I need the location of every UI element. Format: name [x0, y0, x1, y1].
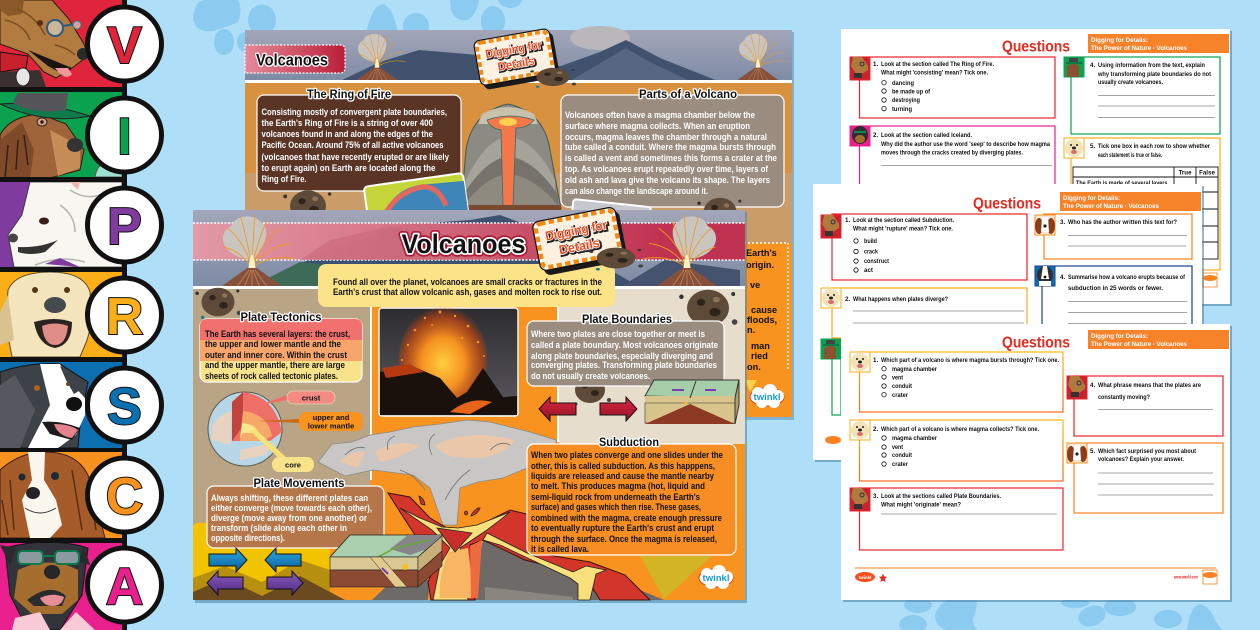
footer logo [825, 436, 841, 444]
twinkl logo front [699, 565, 733, 589]
letter circle S: S [107, 378, 142, 436]
ash cloud [318, 420, 556, 525]
footer: twinkl [859, 575, 871, 580]
question 1: act [864, 267, 873, 274]
question 4 [1064, 57, 1220, 134]
front badge rock [589, 248, 643, 270]
question 3 [850, 488, 1063, 550]
bottom right ground [640, 556, 712, 599]
arrow: blue left [265, 548, 301, 572]
panel: The Ring of Fire: Pacific Ocean. Around 75% of all active volcanoes [262, 140, 444, 150]
question 2: moves through the cracks created by diverging plates. [881, 150, 1023, 156]
question 1: Look at the section called The Ring of Fire. [881, 61, 994, 68]
question 5: volcanoes? Explain your answer. [1098, 456, 1184, 463]
lava spots [419, 496, 480, 516]
rock under plate boundaries [569, 377, 611, 406]
panel: VIPERS dog strips [0, 0, 162, 630]
question 3: What might 'originate' mean? [881, 502, 961, 508]
question 4: why transforming plate boundaries do not [1097, 71, 1211, 78]
rock right [679, 290, 737, 330]
photo card [570, 199, 651, 237]
footer logo [1203, 273, 1217, 287]
question 1: dancing [892, 80, 914, 87]
arrow: blue right [209, 548, 247, 572]
panel: The Ring of Fire: to erupt again) on Earth are located along the [262, 163, 436, 173]
question 4: constantly moving? [1098, 394, 1150, 401]
question 1 [850, 57, 1055, 118]
letter circle I [88, 98, 162, 172]
question 4 [1035, 266, 1192, 336]
strip I: bloodhound with hat [0, 92, 122, 178]
question 5: The Earth is made of several layers. [1076, 180, 1169, 187]
panel: Plate Boundaries: called a plate boundary. Most volcanoes originate [531, 340, 718, 351]
panel: Plate Movements [207, 478, 384, 548]
panel: The Ring of Fire: the Earth's Ring of Fire is a string of over 400 [262, 118, 433, 128]
back poster right orange panel [700, 243, 792, 417]
grey lower strip [485, 587, 573, 600]
back poster right orange panel: ried [751, 351, 768, 361]
question 4: subduction in 25 words or fewer. [1068, 285, 1163, 292]
red V crater [437, 528, 472, 552]
panel: Parts of a Volcano: occurs, magma leaves the chamber through a natural [565, 132, 767, 142]
panel: Plate Boundaries: do not usually create volcanoes. [531, 371, 650, 382]
panel: worksheet 3 [841, 324, 1232, 602]
question 2: What happens when plates diverge? [853, 296, 948, 303]
letter circle V [88, 7, 162, 81]
question 2: Which part of a volcano is where magma collects? Tick one. [881, 426, 1039, 433]
photo: erupting volcano [379, 306, 518, 416]
arrow: purple left [207, 571, 243, 595]
ash cloud swirls [345, 434, 510, 500]
panel: The Ring of Fire: (volcanoes that have recently erupted or are likely [262, 152, 450, 162]
question 1: turning [892, 106, 912, 113]
question 3: Who has the author written this text for? [1068, 219, 1177, 226]
back poster right orange panel: cause [751, 305, 777, 315]
label: upper and lower mantle: lower mantle [308, 422, 354, 430]
back poster right orange panel: n. [747, 325, 755, 335]
letter circle C [88, 458, 162, 532]
left edge question with green box [821, 339, 841, 415]
back poster right orange panel: origin. [746, 260, 774, 270]
arrow: red left [539, 397, 576, 421]
lava red lobes [388, 493, 650, 600]
question 1: 1. [873, 357, 878, 364]
letter circle S [88, 368, 162, 442]
panel: Parts of a Volcano [561, 89, 784, 207]
question 2: Look at the section called Iceland. [881, 132, 972, 139]
banner: Digging for Details: [1063, 195, 1120, 202]
question 1: build [864, 238, 877, 245]
footer: www.twinkl.com [1173, 574, 1198, 580]
panel: The Ring of Fire: volcanoes found in and along the edges of the [262, 129, 433, 139]
panel: Subduction: surface) and gases which then rise. These gases, [531, 502, 701, 513]
question 2: 2. [845, 296, 850, 303]
letter circle C: C [106, 468, 143, 526]
back poster right orange panel: man [751, 341, 770, 351]
back poster header scene [245, 26, 792, 83]
question 4: 4. [1090, 62, 1095, 69]
strip C: spaniel [0, 452, 122, 538]
intro callout [318, 264, 615, 307]
question 1 [821, 214, 1027, 280]
label: crust: crust [302, 394, 321, 402]
panel: Subduction: through the surface. Once the magma is released, [531, 534, 717, 545]
intro callout: Earth's crust that allow volcanic ash, gases and molten rock to rise out. [333, 287, 602, 298]
question 5: Which fact surprised you most about [1098, 448, 1196, 455]
question 5 [1067, 443, 1223, 513]
panel: Subduction: other, this is called subduction. As this happpens, [531, 461, 715, 472]
panel: Plate Tectonics: sheets of rock called tectonic plates. [205, 371, 338, 382]
question 1: vent [892, 374, 903, 382]
panel: Subduction: to eventually rupture the Earth's crust and erupt [531, 523, 715, 534]
back poster title pill: Volcanoes [256, 52, 328, 70]
panel: The Ring of Fire: Ring of Fire. [262, 174, 306, 184]
panel: Subduction [527, 437, 736, 555]
panel: The Ring of Fire [257, 89, 461, 191]
heading: Questions [1002, 38, 1070, 56]
magma stem centre [440, 548, 474, 598]
letter circle R: R [106, 288, 143, 346]
intro callout: Found all over the planet, volcanoes are small cracks or fractures in the [333, 277, 602, 288]
panel: Subduction: it is called lava. [531, 544, 589, 555]
panel: Subduction: to melt. This produces magma (hot, liquid and [531, 481, 705, 492]
diagram: diverging plates block [645, 380, 739, 424]
panel: Plate Tectonics: the upper and lower mantle and the [205, 339, 341, 350]
back poster title pill [245, 45, 345, 73]
panel: Parts of a Volcano: top. As volcanoes erupt repeatedly over time, layers of [565, 164, 769, 174]
panel: Parts of a Volcano: Volcanoes often have a magma chamber below the [565, 110, 755, 120]
back poster right orange panel: on. [747, 362, 761, 372]
question 4: Using information from the text, explain [1098, 62, 1205, 69]
question 2 [850, 126, 1055, 196]
question 3: Look at the sections called Plate Boundaries. [881, 493, 1001, 500]
question 5: each statement is true or false. [1098, 152, 1162, 159]
panel: Subduction: combined with the magma, create enough pressure [531, 513, 722, 524]
back poster right orange panel: ve [750, 280, 760, 290]
panel: Plate Tectonics: The Earth has several layers: the crust, [205, 329, 350, 340]
magma stem red stripe [470, 540, 482, 598]
question 5: False [1199, 170, 1215, 176]
panel: The Ring of Fire: Consisting mostly of convergent plate boundaries, [262, 107, 447, 117]
panel: Plate Movements: transform (slide along each other in [211, 523, 347, 534]
banner [1060, 192, 1201, 211]
label: crust [287, 391, 335, 404]
panel: Plate Tectonics: and the upper mantle, there are large [205, 360, 345, 371]
question 4: usually create volcanoes. [1098, 79, 1163, 86]
panel: The Ring of Fire: The Ring of Fire [307, 89, 391, 101]
question 1: Look at the section called Subduction. [853, 217, 954, 224]
twinkl logo back [750, 384, 784, 408]
panel: worksheet 1 [841, 29, 1232, 306]
chart: cross-section of a volcano [461, 104, 561, 213]
back poster badge rock [530, 68, 576, 88]
question 1: 1. [873, 61, 878, 68]
chart: volcano with magma and ash cloud [318, 420, 664, 600]
panel: Plate Movements: diverge (move away from one another) or [211, 513, 367, 524]
question 3: 3. [873, 493, 878, 500]
strip A: rottweiler with glasses [0, 542, 122, 630]
question 1: magma chamber [892, 366, 938, 373]
rock left [195, 288, 241, 319]
ash cloud patches [340, 435, 515, 468]
question 2 [850, 420, 1063, 481]
magma stem yellow [400, 508, 510, 600]
grey rock right [470, 540, 664, 600]
banner [1088, 330, 1229, 349]
question 4: What phrase means that the plates are [1098, 382, 1201, 389]
panel: Plate Tectonics: outer and inner core. Within the crust [205, 350, 348, 361]
question 4: 4. [1090, 382, 1095, 389]
question 2: magma chamber [892, 435, 938, 442]
question 5: Tick one box in each row to show whether [1098, 143, 1211, 150]
panel: Subduction: liquids are released and cause the mantle nearby [531, 471, 715, 482]
heading: Questions [973, 196, 1041, 212]
panel: Plate Movements: Always shifting, these different plates can [211, 493, 368, 504]
panel: worksheet 2 [813, 184, 1204, 462]
question 2: conduit [892, 452, 912, 459]
label: upper and lower mantle [299, 412, 363, 431]
letter circle P: P [107, 198, 142, 256]
heading: Questions [1002, 334, 1070, 352]
question 2: 2. [873, 426, 878, 433]
banner: The Power of Nature - Volcanoes [1091, 341, 1188, 348]
strip R: golden retriever [0, 272, 122, 357]
letter circle I: I [117, 108, 132, 166]
grey rock left [372, 578, 430, 600]
banner: Digging for Details: [1091, 37, 1148, 44]
bottom left ground [193, 522, 345, 600]
strip V: airedale dog with glasses [0, 0, 122, 87]
question 5: 5. [1090, 143, 1095, 150]
panel: Plate Tectonics [200, 312, 362, 382]
question 1: crack [864, 248, 878, 256]
footer [855, 568, 1217, 584]
question 1: What might 'rupture' mean? Tick one. [853, 226, 953, 232]
title highlight: Volcanoes [402, 229, 526, 259]
panel: Subduction: Subduction [599, 437, 659, 449]
question 1: destroying [892, 97, 920, 104]
panel: Plate Boundaries: converging plates. Transforming plate boundaries [531, 360, 717, 371]
question 4: Summarise how a volcano erupts because of [1068, 274, 1186, 281]
panel: Plate Boundaries: along plate boundaries, especially diverging and [531, 351, 713, 362]
question 1: 1. [845, 217, 850, 224]
panel: Subduction: semi-liquid rock from underneath the Earth's [531, 492, 700, 503]
question 1: crater [892, 392, 909, 399]
question 2 [821, 288, 1027, 338]
panel: Parts of a Volcano: is called a vent and sometimes this forms a crater at the [565, 153, 777, 163]
panel: Plate Tectonics: Plate Tectonics [240, 312, 322, 324]
question 1: conduit [892, 383, 912, 390]
question 1: Which part of a volcano is where magma bursts through? Tick one. [881, 357, 1059, 364]
panel: Plate Boundaries: Where two plates are close together or meet is [531, 329, 705, 340]
banner: The Power of Nature - Volcanoes [1063, 203, 1160, 210]
panel: Parts of a Volcano: surface where magma collects. When an eruption [565, 121, 750, 131]
back poster rock right [697, 198, 743, 229]
letter circle R [88, 278, 162, 352]
panel: back poster [245, 26, 794, 420]
panel: Parts of a Volcano: old ash and lava give the volcano its shape. The layers [565, 175, 770, 185]
back poster right orange panel: floods, [747, 315, 777, 325]
panel: Subduction: When two plates converge and one slides under the [531, 450, 723, 461]
question 3: 3. [1060, 219, 1065, 226]
question 2: crater [892, 461, 909, 468]
arrow: red right [600, 397, 637, 421]
question 3 [1035, 214, 1192, 259]
diagram: subduction block [330, 535, 442, 587]
panel: Plate Movements: opposite directions). [211, 533, 285, 544]
question 5: 5. [1090, 448, 1095, 455]
question 1: construct [864, 258, 889, 265]
question 1: be made up of [892, 88, 931, 96]
arrow: purple right [267, 571, 303, 595]
panel: Parts of a Volcano: can also change the landscape around it. [565, 186, 708, 196]
letter circle A [88, 548, 162, 622]
question 4: 4. [1060, 274, 1065, 281]
letter circle V: V [107, 17, 142, 75]
title: Volcanoes [402, 229, 526, 259]
panel dividers [371, 300, 558, 480]
diagram: layers of the Earth [208, 392, 300, 466]
front badge [532, 206, 628, 277]
letter circle A: A [106, 558, 143, 616]
question 1: What might 'consisting' mean? Tick one. [881, 70, 988, 76]
left tan panel [193, 289, 370, 529]
banner [1088, 34, 1229, 53]
label: core: core [285, 460, 301, 470]
panel: Parts of a Volcano: Parts of a Volcano [639, 89, 737, 101]
question 5: True [1178, 170, 1192, 176]
back poster badge [473, 28, 560, 91]
map of the Ring of Fire [364, 173, 470, 236]
question 1 [850, 352, 1063, 412]
magma right branch [483, 533, 606, 600]
panel: front poster [193, 206, 747, 603]
panel: Plate Boundaries [527, 314, 724, 386]
banner: Digging for Details: [1091, 333, 1148, 340]
banner: The Power of Nature - Volcanoes [1091, 45, 1188, 52]
back poster right orange panel: Earth's [746, 248, 777, 258]
label: core [272, 457, 314, 472]
panel: Plate Movements: Plate Movements [254, 478, 344, 490]
strip S: border collie [0, 362, 122, 448]
right cream panel [559, 289, 745, 444]
panel: Parts of a Volcano: tube called a conduit. Where the magma bursts through [565, 142, 776, 152]
question 2: 2. [873, 132, 878, 139]
question 4 [1067, 376, 1223, 436]
question 2: Why did the author use the word 'seep' to describe how magma [881, 141, 1050, 148]
letter circle P [88, 188, 162, 262]
front poster header scene [193, 210, 745, 289]
back poster rock left [283, 190, 333, 225]
question 5 [1064, 138, 1220, 270]
label: upper and lower mantle: upper and [313, 413, 350, 422]
strip P: white dog [0, 182, 122, 267]
panel: Plate Movements: either converge (move towards each other), [211, 503, 372, 514]
question 2: vent [892, 444, 903, 451]
panel: Plate Boundaries: Plate Boundaries [582, 314, 672, 326]
